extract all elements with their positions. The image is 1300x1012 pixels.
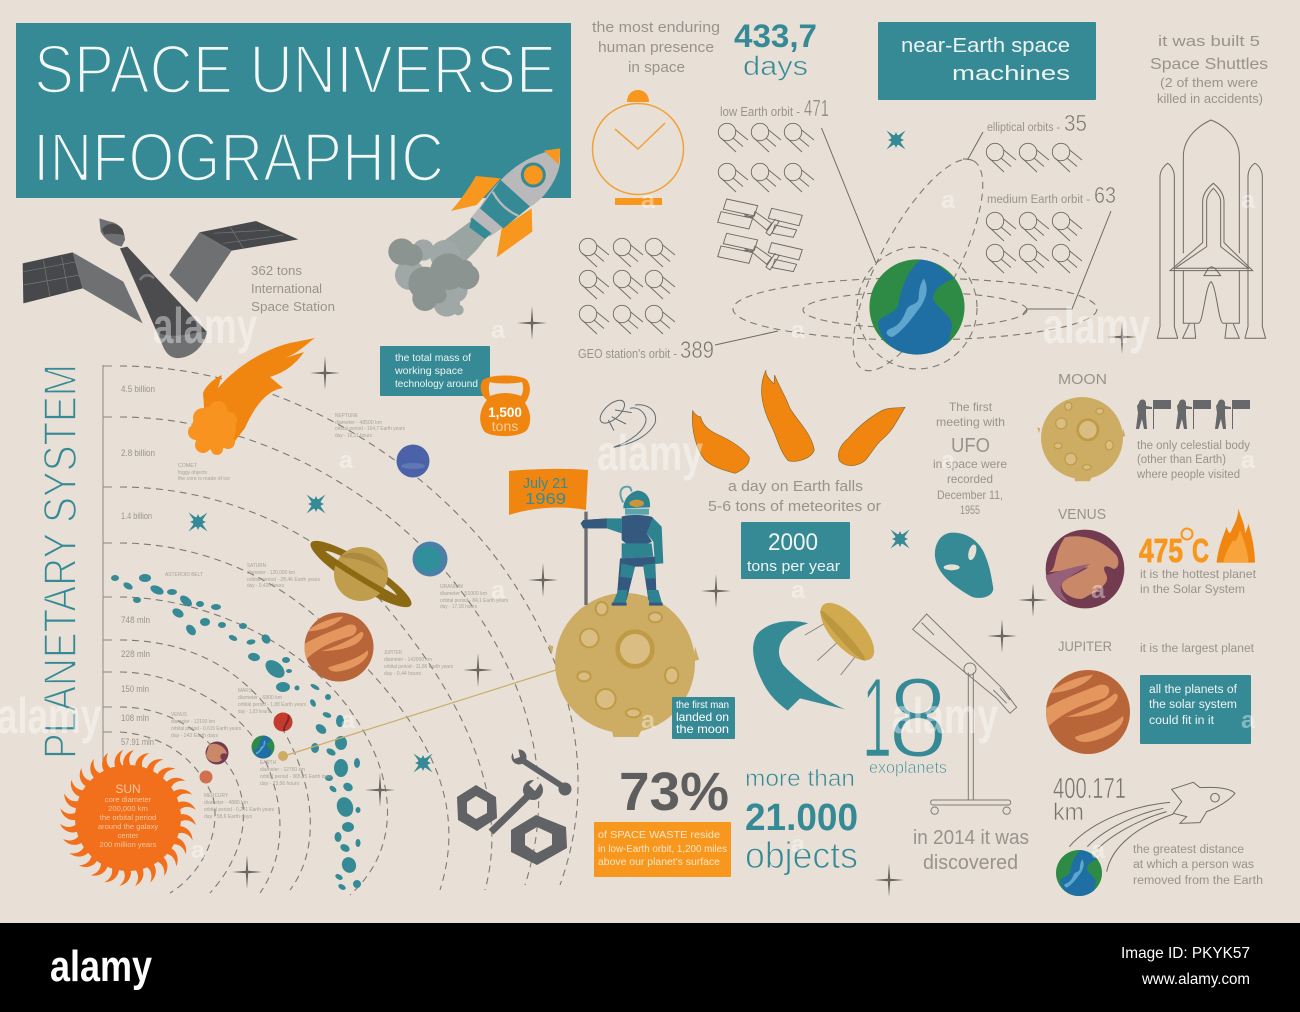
watermarks: a [791, 831, 806, 858]
watermarks: a [791, 577, 806, 604]
icon: kettlebell: 1,500 [488, 405, 522, 420]
text: first UFO meeting: recorded [947, 472, 993, 486]
stat: 21.000 objects: more than [745, 765, 855, 791]
caption: first man on the moon: the first man [676, 700, 729, 711]
callout: total mass [380, 346, 490, 396]
satellites: medium Earth orbit [986, 212, 1082, 273]
stat: meteorites per day: 5-6 tons of meteorites or [708, 499, 881, 515]
planet facts: orbital period - 84,1 Earth years [440, 598, 508, 604]
stat: 21.000 objects: 21.000 [745, 797, 858, 839]
stat: greatest distance: at which a person was [1133, 859, 1254, 871]
label: medium Earth orbit: 63 [1094, 182, 1116, 208]
planet facts: diameter - 120,000 km [247, 570, 295, 576]
distance labels: 2.8 billion [121, 448, 155, 459]
icon: space shuttle outline [1157, 120, 1266, 338]
text: first UFO meeting: December 11, [937, 488, 1003, 502]
earth [869, 258, 965, 357]
planet: earth [251, 735, 275, 759]
icon: small satellite outline [596, 396, 656, 447]
stat: 21.000 objects [745, 765, 858, 876]
moon fact: the only celestial body [1137, 440, 1250, 452]
big moon [548, 593, 699, 737]
flag: 1969 [525, 491, 566, 508]
stat: discovered in 2014: discovered [923, 852, 1018, 874]
satellites: elliptical [986, 143, 1082, 172]
sun facts: center [117, 831, 139, 840]
stat: space shuttles [1150, 33, 1268, 106]
stations: low Earth orbit [718, 199, 802, 272]
watermarks: alamy [1043, 298, 1150, 354]
label: low Earth orbit: 471 [804, 95, 829, 121]
section: moon: MOON [1058, 371, 1107, 388]
watermarks: a [1091, 837, 1106, 864]
stat: 400.171 km: 400.171 [1053, 773, 1126, 805]
label: GEO orbit [578, 337, 714, 364]
sparkle stars [188, 130, 1137, 897]
distance labels: 748 mln [121, 615, 150, 626]
planet facts: diameter - 12100 km [171, 719, 215, 725]
icon: rocket outline with trails [1069, 782, 1235, 872]
planet facts: day - 23,56 hours [260, 781, 299, 787]
section: jupiter [1045, 638, 1255, 754]
stat: greatest distance: removed from the Earth [1133, 875, 1263, 887]
moon illustration [1037, 397, 1125, 481]
planet facts: MARS [238, 688, 252, 694]
caption: first man on the moon: landed on [676, 710, 729, 724]
text: first UFO meeting: The first [949, 400, 993, 414]
watermarks: a [641, 707, 656, 734]
watermarks: alamy [892, 688, 998, 744]
label: low Earth orbit: low Earth orbit - [720, 105, 800, 119]
heading: near-Earth space machines: near-Earth space [901, 35, 1070, 57]
moon fact [1136, 440, 1250, 481]
jupiter callout: could fit in it [1149, 715, 1215, 727]
stat: 18 exoplanets: 1 [862, 655, 892, 782]
label: elliptical orbits: 35 [1064, 110, 1087, 136]
title text: SPACE UNIVERSE [34, 31, 556, 108]
venus fact [1140, 567, 1257, 596]
watermarks: a [1241, 187, 1256, 214]
planet facts: VENUS [171, 712, 187, 718]
sun facts: 200,000 km [108, 804, 148, 813]
rocket with smoke [388, 148, 560, 317]
planetary distance axis [103, 365, 155, 760]
label: GEO orbit: GEO station's orbit - [578, 347, 677, 361]
stat: space shuttles: it was built 5 [1158, 33, 1260, 50]
section: jupiter: it is the largest planet [1140, 643, 1255, 655]
sun facts: SUN [115, 782, 141, 796]
watermarks: a [791, 317, 806, 344]
comet caption: foggy objects [178, 470, 207, 476]
planet facts: MERCURY [204, 793, 228, 799]
planet: neptune [396, 444, 430, 478]
small earth [1056, 850, 1102, 897]
callout: total mass: the total mass of [395, 352, 471, 364]
text: first UFO meeting: UFO [951, 435, 990, 457]
label: low Earth orbit [720, 95, 829, 121]
text: first UFO meeting: 1955 [960, 503, 980, 517]
section: jupiter: JUPITER [1058, 638, 1112, 654]
callout: space waste: above our planet's surface [598, 857, 720, 868]
earth with orbits [715, 128, 1111, 387]
distance labels: 57.91 mln [121, 737, 154, 748]
sun facts: the orbital period [100, 813, 156, 822]
title banner [16, 23, 571, 198]
watermarks: a [941, 187, 956, 214]
watermarks: alamy [597, 425, 703, 481]
callout: space waste: in low-Earth orbit, 1,200 miles [598, 844, 727, 855]
watermarks: alamy [0, 688, 101, 744]
asteroid belt [111, 574, 361, 891]
stat: station mass [251, 263, 335, 314]
stat: presence in space: in space [628, 60, 685, 76]
distance labels: 108 mln [121, 713, 149, 724]
planet facts: diameter - 4880 km [204, 800, 248, 806]
planet facts: diameter - 6800 km [238, 695, 282, 701]
footer logo: alamy [50, 942, 152, 991]
planet facts: EARTH [260, 760, 276, 766]
footer band [0, 923, 1300, 1012]
icon: alarm clock [592, 90, 684, 205]
watermarks: a [339, 447, 354, 474]
planet facts: day - 1,03 hours [238, 709, 270, 715]
sun facts: around the galaxy [98, 822, 158, 831]
stat: space shuttles: Space Shuttles [1150, 56, 1268, 73]
planet facts: orbital period - 1,88 Earth years [238, 702, 306, 708]
watermarks: a [1091, 577, 1106, 604]
icon: telescope [913, 614, 1017, 814]
callout: 2000 tons per year: 2000 [768, 529, 818, 556]
jupiter callout: all the planets of [1149, 684, 1238, 696]
planet facts: URANIUM [440, 584, 463, 590]
stat: space shuttles: killed in accidents) [1157, 91, 1263, 106]
section: venus [1046, 506, 1257, 608]
distance labels: 150 mln [121, 684, 149, 695]
line from earth's moon to big moon [284, 670, 556, 756]
section: venus: VENUS [1058, 506, 1106, 523]
footer url: www.alamy.com [1141, 971, 1250, 988]
watermarks: alamy [153, 298, 257, 354]
label: elliptical orbits [987, 110, 1087, 136]
callout: 2000 tons per year [741, 522, 850, 579]
label: GEO orbit: 389 [680, 337, 714, 364]
callout: total mass: working space [394, 365, 463, 377]
comet caption [178, 463, 230, 482]
watermarks: a [341, 707, 356, 734]
callout: total mass: technology around [395, 378, 478, 390]
watermarks: a [491, 317, 506, 344]
planet facts: JUPITER [384, 650, 402, 656]
icon: alien head [935, 533, 993, 598]
planet: jupiter [304, 612, 374, 682]
jupiter callout: the solar system [1149, 699, 1237, 711]
stat: station mass: 362 tons [251, 263, 303, 278]
stat: station mass: Space Station [251, 299, 335, 314]
stat: presence in space: the most enduring [592, 20, 720, 36]
icon: flame [1217, 508, 1255, 563]
stat: discovered in 2014 [913, 827, 1029, 874]
caption: first man on the moon: the moon [676, 722, 729, 736]
stat: greatest distance: the greatest distance [1133, 844, 1244, 856]
moon fact: where people visited [1136, 469, 1240, 481]
stat: 18 exoplanets: exoplanets [869, 758, 947, 777]
icon: kettlebell: tons [492, 418, 518, 434]
stat: meteorites per day [708, 479, 881, 515]
icon: UFO with swoosh [753, 594, 883, 711]
venus fact: it is the hottest planet [1140, 567, 1257, 581]
planet: venus [206, 742, 228, 764]
jupiter callout [1140, 675, 1251, 744]
planet facts: orbital period - 11,86 Earth years [384, 664, 453, 670]
stat: 400.171 km [1053, 773, 1126, 826]
leader lines [715, 128, 1111, 345]
stat: discovered in 2014: in 2014 it was [913, 827, 1029, 849]
callout: space waste [594, 822, 731, 877]
planet facts: day - 17,18 hours [440, 604, 477, 610]
title text [33, 31, 556, 196]
planet facts: NEPTUNE [335, 413, 358, 419]
flag [509, 469, 588, 515]
stat: 21.000 objects: objects [745, 835, 858, 876]
distance labels: 4.5 billion [121, 384, 155, 395]
astronauts with flags [1136, 400, 1250, 429]
stat: 73% space waste: 73% [619, 762, 729, 822]
stat: greatest distance [1133, 844, 1263, 887]
temperature: 475 [1139, 532, 1183, 569]
title text: INFOGRAPHIC [33, 119, 444, 196]
stat: presence in space [592, 20, 720, 76]
watermarks: a [1241, 447, 1256, 474]
stat: 433,7 days: 433,7 [734, 18, 817, 54]
sun facts: 200 million years [100, 840, 157, 849]
sun facts: core diameter [105, 795, 152, 804]
planet facts: ASTEROID BELT [165, 572, 203, 578]
watermarks [0, 187, 1256, 864]
planet facts: orbital period - 164,7 Earth years [335, 426, 405, 432]
planets [200, 444, 448, 784]
callout: 2000 tons per year: tons per year [747, 558, 840, 575]
venus fact: in the Solar System [1140, 582, 1245, 596]
text: first UFO meeting: in space were [933, 457, 1007, 471]
stat: station mass: International [251, 281, 322, 296]
watermarks: a [491, 577, 506, 604]
watermarks: a [191, 837, 206, 864]
text: first UFO meeting: meeting with [936, 415, 1005, 429]
space station [23, 218, 298, 358]
watermarks: a [1241, 707, 1256, 734]
jupiter illustration [1045, 670, 1130, 754]
planet: mercury [200, 770, 212, 784]
planet: mars [274, 712, 292, 732]
label: medium Earth orbit: medium Earth orbit - [987, 194, 1090, 206]
planet facts: SATURN [247, 563, 266, 569]
planet facts: diameter - 48500 km [335, 420, 382, 426]
caption: first man on the moon [672, 697, 735, 739]
comet caption: COMET [178, 463, 198, 469]
distance labels [121, 384, 155, 748]
planet facts: diameter - 51000 km [440, 591, 487, 597]
planet facts: orbital period - 28,46 Earth years [247, 577, 320, 583]
planet: saturn [304, 532, 418, 616]
icon: kettlebell [480, 376, 530, 436]
comet [178, 338, 315, 482]
stat: meteorites per day: a day on Earth falls [728, 479, 863, 495]
planet facts: orbital period - 0,241 Earth years [204, 807, 274, 813]
watermarks: a [641, 187, 656, 214]
satellites: low Earth orbit [718, 123, 814, 192]
meteorites [692, 370, 905, 473]
footer image id: Image ID: PKYK57 [1121, 945, 1250, 962]
orbit lines [120, 366, 578, 895]
text: first UFO meeting [933, 400, 1007, 517]
watermarks: a [941, 447, 956, 474]
stat: 18 exoplanets: 8 [888, 655, 948, 782]
planet facts: orbital period - 365,25 Earth days [260, 774, 332, 780]
planet facts: diameter - 142000 km [384, 657, 432, 663]
heading: near-Earth space machines: machines [952, 63, 1070, 85]
comet caption: the core is made of ice [178, 476, 230, 482]
stat: presence in space: human presence [598, 40, 714, 56]
label: elliptical orbits: elliptical orbits - [987, 122, 1060, 134]
astronaut [581, 487, 663, 606]
stat: 73% space waste [594, 762, 731, 877]
section: moon [1037, 371, 1250, 481]
planet facts: day - 58,6 Earth days [204, 814, 252, 820]
stat: 400.171 km: km [1053, 799, 1084, 826]
venus illustration [1046, 530, 1124, 608]
sun facts [98, 782, 158, 849]
flag: July 21 [523, 476, 568, 492]
callout: space waste: of SPACE WASTE reside [598, 830, 720, 841]
stat: space shuttles: (2 of them were [1160, 75, 1258, 90]
temperature: C [1192, 532, 1209, 569]
satellites: GEO orbit [579, 238, 675, 334]
earth's moon [278, 751, 288, 761]
planet: uranus [412, 542, 448, 576]
planet facts: day - 0,426 hours [247, 583, 284, 589]
icon: wrenches and nuts [457, 748, 572, 865]
planet facts: day - 16,11 hours [335, 433, 372, 439]
distance labels: 228 mln [121, 649, 150, 660]
planet facts: day - 0,44 hours [384, 671, 421, 677]
distance labels: 1.4 billion [121, 511, 152, 522]
heading: near-Earth space machines [878, 22, 1096, 100]
planet facts: day - 243 Earth days [171, 733, 218, 739]
sun [60, 750, 196, 886]
label: medium Earth orbit [987, 182, 1116, 208]
planet facts [165, 413, 508, 820]
stat: 433,7 days: days [743, 51, 808, 81]
stat: 433,7 days [734, 18, 817, 81]
heading: planetary system: PLANETARY SYSTEM [34, 364, 86, 759]
planet facts: diameter - 12750 km [260, 767, 305, 773]
moon fact: (other than Earth) [1137, 454, 1226, 466]
planet facts: orbital period - 0,615 Earth years [171, 726, 241, 732]
